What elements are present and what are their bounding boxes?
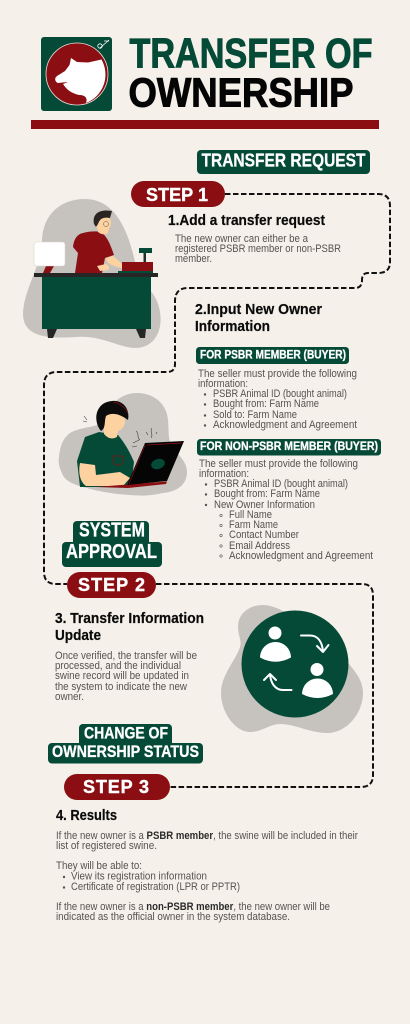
step 3 body text: owner. xyxy=(55,691,84,703)
badge: change of ownership status: CHANGE OF xyxy=(84,724,168,742)
illustration: person at desk xyxy=(23,199,161,348)
logo: pig emblem xyxy=(41,37,112,111)
results heading: 4. Results xyxy=(56,808,117,824)
non-PSBR member requirements: Contact Number xyxy=(229,529,299,541)
PSBR member requirements: Bought from: Farm Name xyxy=(213,398,319,410)
non-PSBR member requirements xyxy=(199,458,373,562)
step 3 body text: the system to indicate the new xyxy=(55,681,187,693)
title underline bar xyxy=(31,120,379,129)
non-PSBR member requirements: Bought from: Farm Name xyxy=(214,488,320,500)
results body text: If the new owner is a non-PSBR member, the new owner will be xyxy=(56,901,330,913)
non-PSBR member requirements: Email Address xyxy=(229,540,291,552)
step 3 heading: Update xyxy=(55,628,101,644)
step 2 heading: Information xyxy=(195,319,270,335)
PSBR member requirements: The seller must provide the following xyxy=(198,368,357,380)
step 3 pill: STEP 3 xyxy=(83,777,149,797)
badge: change of ownership status xyxy=(48,724,203,764)
title: OWNERSHIP xyxy=(128,70,354,116)
badge: system approval: SYSTEM xyxy=(79,520,145,542)
PSBR member requirements: Acknowledgment and Agreement xyxy=(213,419,357,431)
step 1 body text: member. xyxy=(175,253,212,265)
dashed flow path xyxy=(44,194,390,787)
step 1 pill: STEP 1 xyxy=(146,185,208,205)
step 3 heading xyxy=(55,611,204,644)
step 2 pill xyxy=(67,572,156,598)
results body text: If the new owner is a PSBR member, the swine will be included in their xyxy=(56,830,358,842)
badge: for PSBR member xyxy=(196,347,349,364)
badge: system approval: APPROVAL xyxy=(66,541,157,563)
title xyxy=(128,30,372,116)
non-PSBR member requirements: information: xyxy=(199,468,249,480)
non-PSBR member requirements: Farm Name xyxy=(229,519,278,531)
results body text: They will be able to: xyxy=(56,860,142,872)
step 2 heading xyxy=(195,302,322,335)
non-PSBR member requirements: Acknowledgment and Agreement xyxy=(229,550,373,562)
PSBR member requirements: information: xyxy=(198,378,248,390)
PSBR member requirements: PSBR Animal ID (bought animal) xyxy=(213,388,347,400)
step 1 body text: registered PSBR member or non-PSBR xyxy=(175,243,341,255)
icon: owners exchange xyxy=(221,605,363,733)
step 1 body text: The new owner can either be a xyxy=(175,233,308,245)
heading badge: transfer request: TRANSFER REQUEST xyxy=(202,150,366,170)
step 2 heading: 2.Input New Owner xyxy=(195,302,322,318)
step 3 body text: processed, and the individual xyxy=(55,660,181,672)
badge: for non-PSBR member: FOR NON-PSBR MEMBER (BUYER) xyxy=(200,441,378,453)
non-PSBR member requirements: New Owner Information xyxy=(214,499,315,511)
PSBR member requirements: Sold to: Farm Name xyxy=(213,409,297,421)
step 3 pill xyxy=(64,774,170,800)
step 2 pill: STEP 2 xyxy=(78,575,145,595)
step 3 body text: Once verified, the transfer will be xyxy=(55,650,197,662)
results body text xyxy=(56,830,358,923)
results body text: View its registration information xyxy=(71,870,207,882)
badge: for PSBR member: FOR PSBR MEMBER (BUYER) xyxy=(200,350,346,362)
step 1 heading: 1.Add a transfer request xyxy=(168,213,325,229)
non-PSBR member requirements: Full Name xyxy=(229,509,272,521)
step 3 body text xyxy=(55,650,197,703)
PSBR member requirements xyxy=(198,368,357,431)
results body text: Certificate of registration (LPR or PPTR) xyxy=(71,881,240,893)
badge: change of ownership status: OWNERSHIP STATUS xyxy=(52,743,199,761)
step 3 heading: 3. Transfer Information xyxy=(55,611,204,627)
non-PSBR member requirements: The seller must provide the following xyxy=(199,458,358,470)
badge: for non-PSBR member xyxy=(197,439,381,456)
non-PSBR member requirements: PSBR Animal ID (bought animal) xyxy=(214,478,348,490)
results body text: list of registered swine. xyxy=(56,840,157,852)
step 1 body text xyxy=(175,233,341,265)
step 1 pill xyxy=(131,181,225,207)
illustration: person at laptop xyxy=(59,393,187,496)
step 3 body text: swine record will be updated in xyxy=(55,670,189,682)
badge: system approval xyxy=(62,520,162,567)
results body text: indicated as the official owner in the system database. xyxy=(56,911,290,923)
